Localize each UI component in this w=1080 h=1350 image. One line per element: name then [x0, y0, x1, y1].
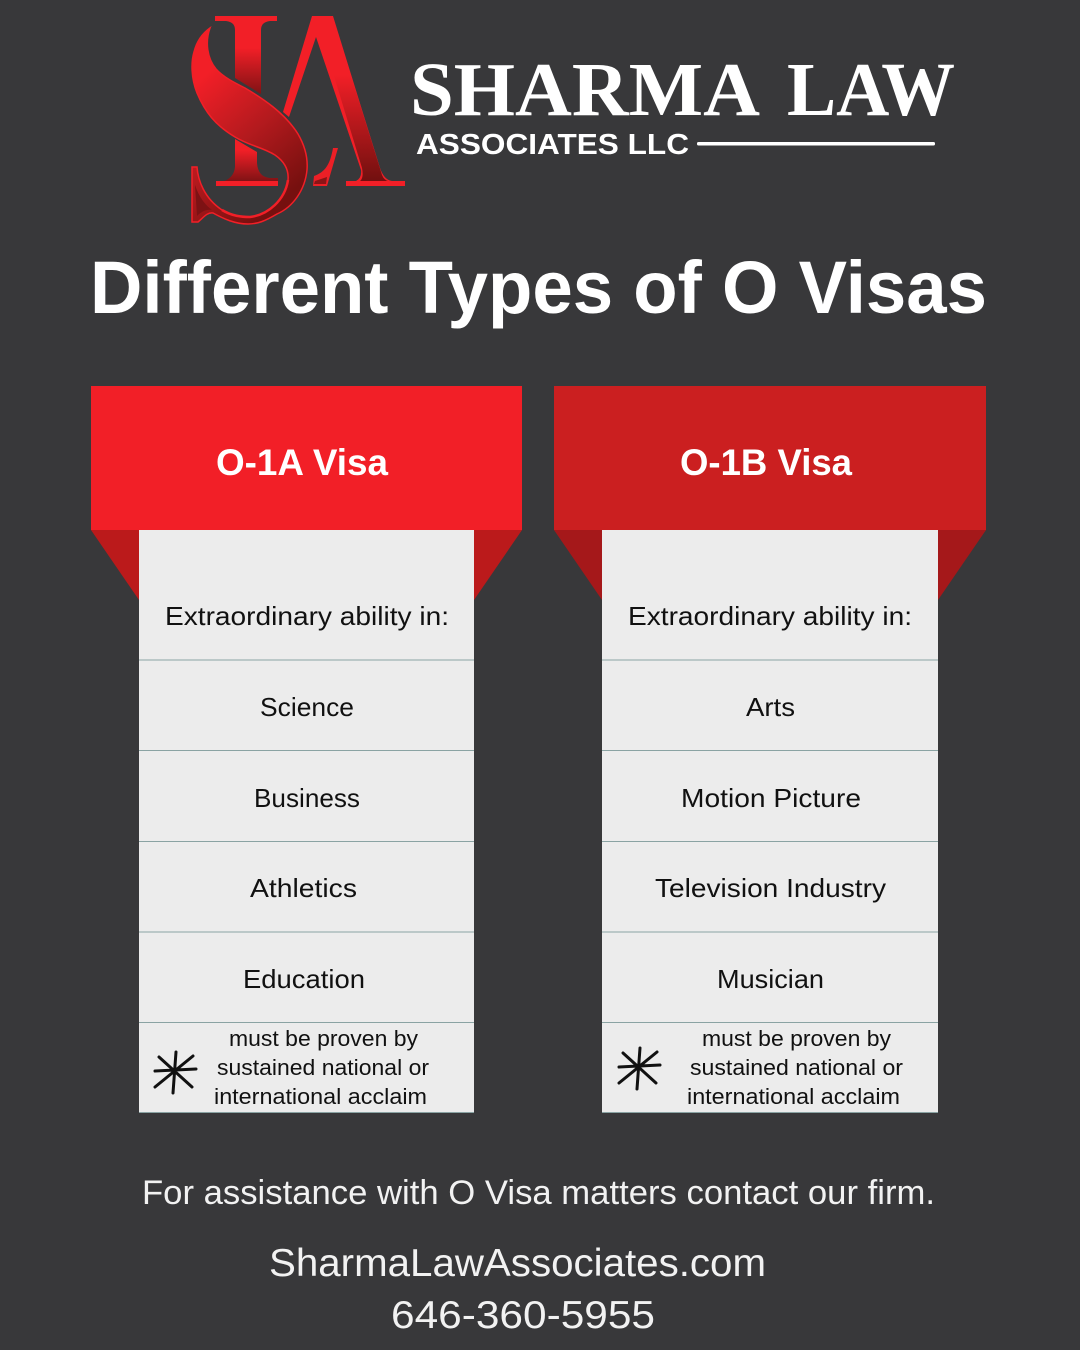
- list intro: Extraordinary ability in:: [628, 601, 912, 631]
- note: international acclaim: [687, 1084, 900, 1109]
- panel: O-1A Visa: [91, 386, 522, 1113]
- logo wordmark: [410, 48, 955, 132]
- header: [91, 386, 522, 530]
- note: [687, 1026, 903, 1109]
- icon: asterisk: [155, 1052, 196, 1093]
- note: [214, 1026, 429, 1109]
- list card: [139, 530, 474, 1113]
- note: sustained national or: [690, 1055, 903, 1080]
- note: must be proven by: [229, 1026, 418, 1051]
- footer call to action: For assistance with O Visa matters contact our firm.: [142, 1174, 935, 1212]
- item: Business: Business: [254, 783, 360, 813]
- note: sustained national or: [217, 1055, 429, 1080]
- item: Television Industry: Television Industry: [655, 873, 886, 903]
- panel: O-1B Visa: [554, 386, 986, 1113]
- header: [554, 386, 986, 530]
- list intro: Extraordinary ability in:: [165, 601, 449, 631]
- item: Arts: Arts: [746, 692, 795, 722]
- ribbon folds: [91, 530, 522, 600]
- item: Musician: Musician: [717, 964, 824, 994]
- ribbon folds: [554, 530, 986, 600]
- list card: [602, 530, 938, 1113]
- phone: 646-360-5955: [391, 1294, 655, 1337]
- icon: asterisk: [619, 1048, 660, 1089]
- item: Science: Science: [260, 692, 354, 722]
- header label: O-1A Visa: [216, 442, 388, 483]
- logo: [192, 16, 955, 224]
- logo wordmark: SHARMA: [410, 48, 760, 132]
- logo subline: ASSOCIATES LLC: [416, 129, 689, 161]
- note: must be proven by: [702, 1026, 891, 1051]
- note: international acclaim: [214, 1084, 427, 1109]
- title: Different Types of O Visas: [90, 246, 987, 329]
- website: SharmaLawAssociates.com: [269, 1242, 766, 1285]
- header label: O-1B Visa: [680, 442, 852, 483]
- item: Education: Education: [243, 964, 365, 994]
- item: Athletics: Athletics: [250, 873, 357, 903]
- logo wordmark: LAW: [787, 48, 955, 132]
- logo rule: [697, 142, 935, 146]
- logo icon: SLA monogram: [192, 16, 405, 224]
- item: Motion Picture: Motion Picture: [681, 783, 861, 813]
